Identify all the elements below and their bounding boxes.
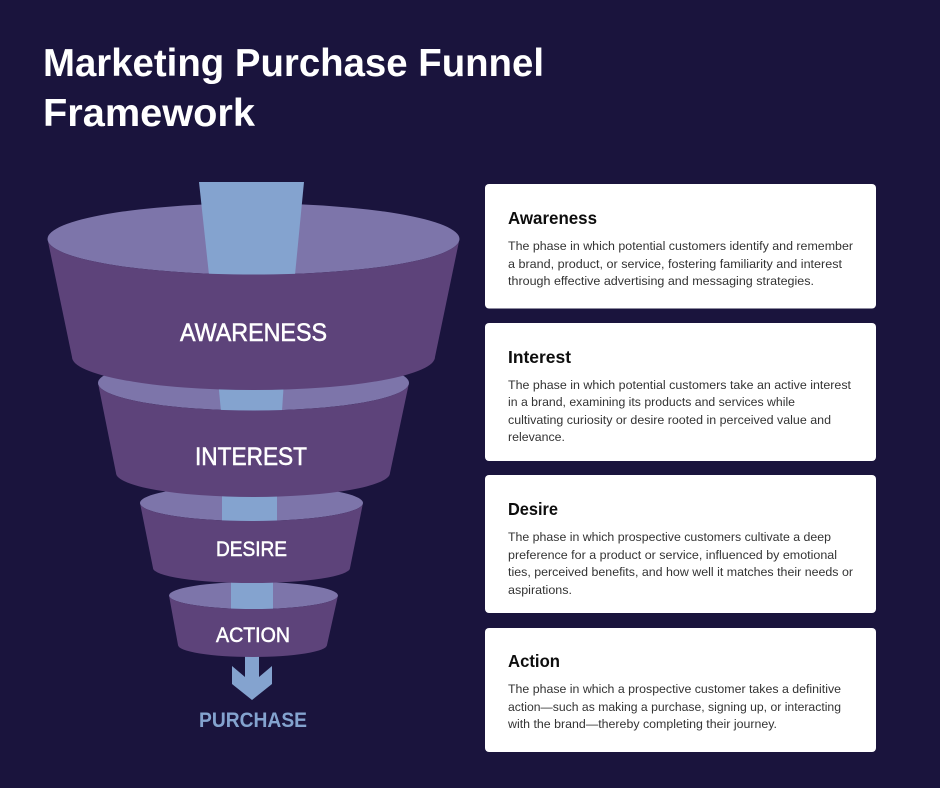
panel: action: The phase in which a prospective customer takes a definitive (508, 682, 841, 696)
panel: awareness (485, 184, 876, 308)
funnel diagram (48, 182, 460, 732)
panel: awareness: The phase in which potential customers identify and remember (508, 239, 853, 253)
panel: awareness: Awareness (508, 208, 597, 228)
panel: awareness: through effective advertising and messaging strategies. (508, 274, 814, 288)
panel: awareness: a brand, product, or service, fostering familiarity and interest (508, 257, 843, 271)
title: Marketing Purchase Funnel (43, 42, 544, 85)
panel: desire: ties, perceived benefits, and how well it matches their needs or (508, 565, 853, 579)
funnel tier: awareness (48, 182, 460, 390)
arrow: down to purchase (232, 655, 272, 700)
panel: interest: The phase in which potential customers take an active interest (508, 378, 852, 392)
panel: desire (485, 475, 876, 613)
panel: interest: relevance. (508, 430, 565, 444)
funnel tier: interest: INTEREST (195, 443, 307, 471)
funnel tier: action: ACTION (216, 624, 290, 647)
panel: interest: Interest (508, 347, 571, 367)
panel: desire: aspirations. (508, 583, 572, 597)
label: purchase: PURCHASE (199, 709, 307, 732)
funnel tier: interest (98, 356, 409, 497)
panel: desire: preference for a product or service, influenced by emotional (508, 548, 837, 562)
funnel tier: awareness: AWARENESS (180, 319, 327, 347)
panel: action: with the brand—thereby completing their journey. (507, 717, 777, 731)
panel: desire: Desire (508, 499, 558, 519)
funnel tier: action (169, 582, 338, 657)
panel: interest (485, 323, 876, 461)
title: Framework (43, 92, 255, 135)
panel: desire: The phase in which prospective customers cultivate a deep (508, 530, 831, 544)
funnel tier: desire (140, 485, 363, 583)
title (43, 42, 544, 135)
panel: action: action—such as making a purchase, signing up, or interacting (508, 700, 841, 714)
panel: interest: cultivating curiosity or desire rooted in perceived value and (508, 413, 831, 427)
panel: interest: in a brand, examining its products and services while (508, 395, 795, 409)
panel: action (485, 628, 876, 752)
panel: action: Action (508, 651, 560, 671)
funnel tier: desire: DESIRE (216, 538, 287, 561)
